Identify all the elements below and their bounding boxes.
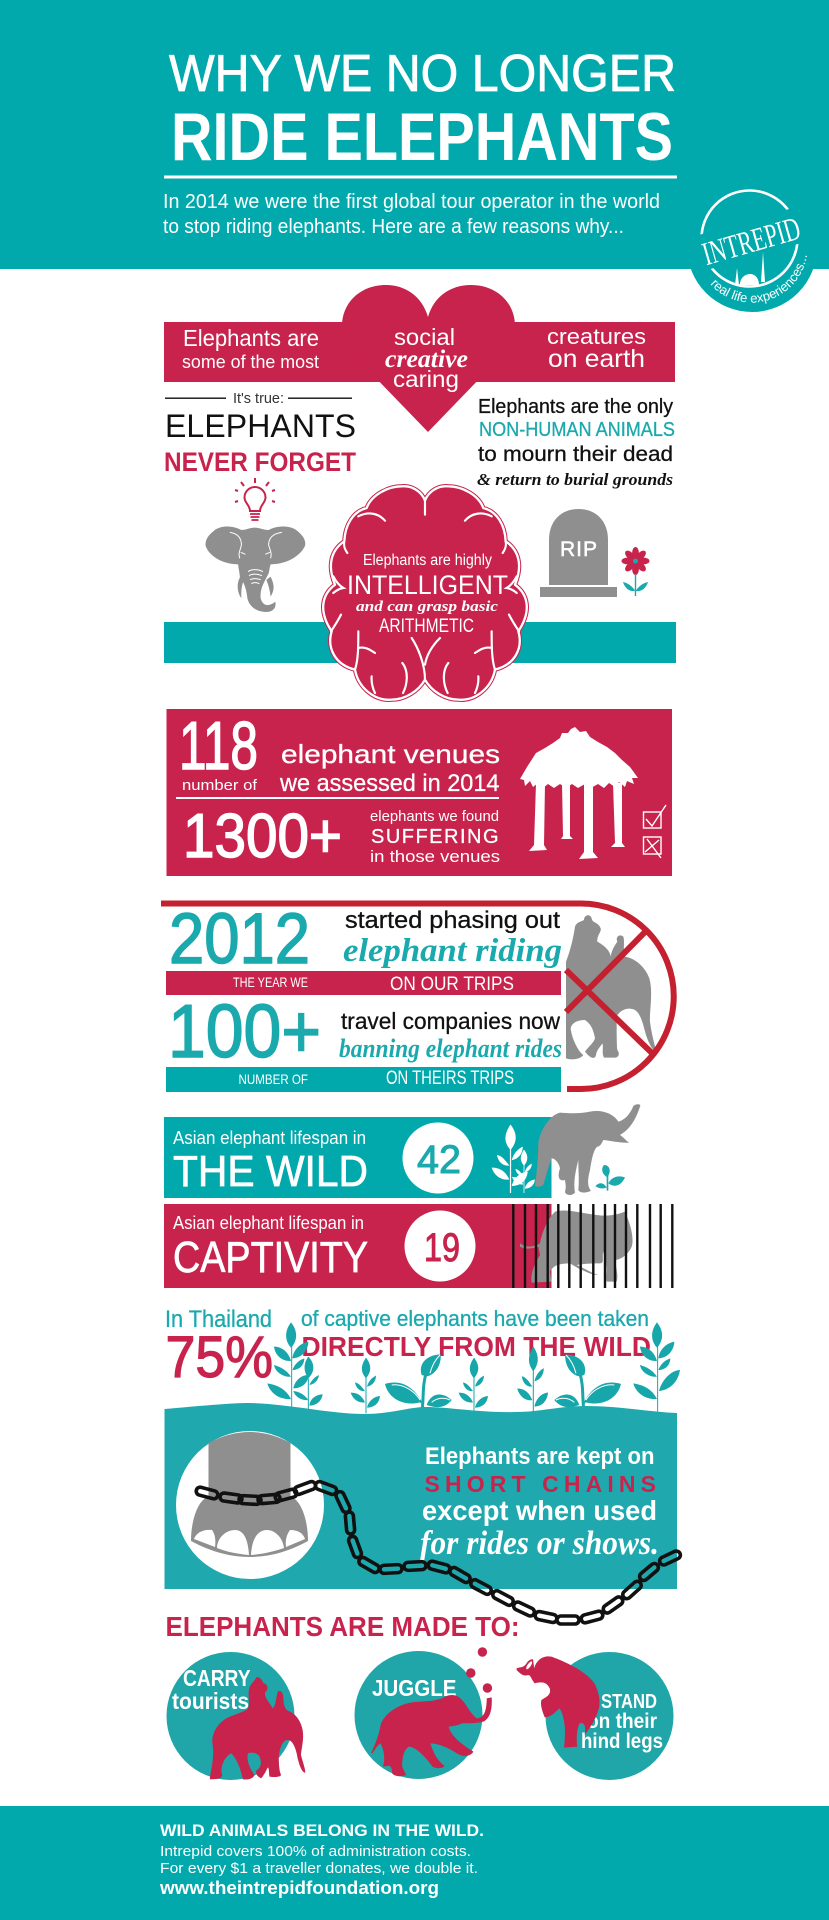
venue stats: SUFFERING [371,826,498,848]
brain text: INTELLIGENT [347,570,508,600]
icon: prohibited elephant ride [161,904,674,1089]
icon: brain [323,486,527,700]
venue stats: number of [182,777,258,794]
footer text: WILD ANIMALS BELONG IN THE WILD. [160,1821,484,1840]
logo: Intrepid: real life experiences... [710,256,807,304]
icon: thatched hut [520,727,638,859]
stat: 100+: travel companies now [341,1008,560,1034]
heading: elephants never forget [164,390,356,477]
text: mourn their dead: NON-HUMAN ANIMALS [479,419,675,441]
panel: short chains [164,1403,682,1624]
icon: checkboxes [644,805,666,858]
text: 75% taken from the wild [165,1306,651,1390]
icon: heart [342,285,515,432]
footer text: www.theintrepidfoundation.org [159,1878,439,1898]
text: 75% taken from the wild: In Thailand [165,1306,272,1333]
icon: wild elephant [535,1104,640,1195]
text: 75% taken from the wild: 75% [166,1325,273,1390]
band text [182,324,646,392]
stat circle: 42: 42 [417,1138,461,1182]
panel: juggle [354,1647,492,1779]
chains text: Elephants are kept on [425,1443,654,1470]
icon: chain [195,1480,682,1624]
chains text: for rides or shows. [420,1525,659,1562]
panel: lifespan in the wild: THE WILD [173,1147,368,1196]
title [164,45,677,178]
panel: juggle: JUGGLE [372,1675,456,1701]
panel: carry tourists [166,1652,305,1780]
icon: small teal plant [595,1165,625,1191]
icon: elephant foot [176,1431,324,1579]
stat circle: 42 [402,1122,474,1194]
chains text: except when used [422,1495,657,1526]
text: mourn their dead [477,396,675,489]
title: RIDE ELEPHANTS [171,99,673,175]
venue stats: in those venues [370,847,500,866]
stat: 100+ [166,989,562,1092]
stat: 2012 [166,900,562,995]
panel: carry tourists: tourists [172,1688,249,1714]
footer text: Intrepid covers 100% of administration costs. [160,1843,471,1860]
icon: juggling elephant [371,1695,492,1776]
panel: carry tourists: CARRY [183,1665,250,1691]
icon: gravestone [540,509,617,597]
stat: 2012: elephant riding [343,933,562,969]
icon: white plant [492,1125,535,1193]
heading: elephants never forget: It's true: [233,390,284,407]
text: mourn their dead: Elephants are the only [478,396,673,418]
text: mourn their dead: to mourn their dead [478,443,673,466]
icon: cage bars [513,1204,672,1288]
stat circle: 19 [404,1210,476,1282]
icon: elephant with riders [210,1677,305,1780]
stat: 2012: 2012 [169,900,310,979]
stat: 100+: NUMBER OF [238,1071,308,1087]
band text: creative [385,346,468,373]
logo: Intrepid [690,189,813,312]
panel: lifespan in the wild [164,1104,640,1198]
band text: Elephants are [183,325,319,351]
brain text: Elephants are highly [363,552,492,569]
panel: stand on hind legs [517,1652,674,1780]
brain text: and can grasp basic [356,599,499,615]
panel: lifespan in captivity [164,1204,672,1288]
text: 75% taken from the wild: DIRECTLY FROM THE WILD [302,1331,651,1362]
title: WHY WE NO LONGER [169,45,676,103]
footer band [0,1806,829,1920]
icon: captive elephant [520,1211,633,1283]
band text: on earth [548,345,645,373]
heading: elephants never forget: NEVER FORGET [164,447,356,477]
panel: lifespan in captivity: Asian elephant lifespan in [173,1213,364,1233]
venue stats [176,708,500,871]
chains text: SHORT CHAINS [424,1471,656,1497]
stat: 100+: banning elephant rides [339,1034,562,1063]
venue stats: 118 [179,708,258,784]
panel: lifespan in the wild: Asian elephant lifespan in [173,1128,366,1148]
panel: stand on hind legs: hind legs [581,1730,663,1753]
text: mourn their dead: & return to burial grounds [477,470,673,489]
panel: venues assessed [166,708,672,876]
stat circle: 19: 19 [424,1226,460,1270]
brain text [347,552,508,637]
icon: standing elephant [517,1656,600,1748]
stat: 100+: ON THEIRS TRIPS [386,1068,514,1089]
stat: 2012: ON OUR TRIPS [390,974,514,995]
venue stats: elephant venues [281,739,500,769]
venue stats: elephants we found [370,808,499,825]
venue stats: we assessed in 2014 [279,770,500,797]
stat: 2012: started phasing out [345,907,560,934]
icon: light bulb [235,478,275,520]
stat: 2012: THE YEAR WE [233,974,308,990]
panel: social creatures band [164,285,675,432]
band text: some of the most [182,352,319,372]
heading: elephants never forget: ELEPHANTS [165,408,356,444]
footer text: For every $1 a traveller donates, we double it. [160,1860,478,1877]
panel: lifespan in captivity: CAPTIVITY [173,1233,368,1282]
text: 75% taken from the wild: of captive elephants have been taken [301,1306,649,1331]
icon: gravestone: RIP [560,538,597,561]
panel: stand on hind legs: STAND [601,1691,657,1713]
icon: row of plants [267,1322,680,1413]
icon: juggling balls [466,1647,492,1693]
intro text: to stop riding elephants. Here are a few reasons why... [163,216,624,238]
stat: 100+: 100+ [168,989,321,1073]
band text: creatures [547,324,646,349]
chains text [420,1443,659,1562]
icon: flower [622,547,650,596]
band text: social [394,324,455,350]
intro text: In 2014 we were the first global tour operator in the world [163,191,660,213]
icon: elephant head [206,526,305,612]
panel: stand on hind legs: on their [587,1710,657,1733]
header band [0,0,829,269]
teal bar behind brain [164,622,676,663]
venue stats: 1300+ [183,802,342,871]
heading: elephants are made to: ELEPHANTS ARE MADE TO: [166,1611,520,1642]
brain text: ARITHMETIC [379,616,474,637]
footer text [159,1821,484,1898]
band text: caring [393,366,459,392]
intro text [163,191,660,238]
panel: no elephant riding [161,900,674,1092]
